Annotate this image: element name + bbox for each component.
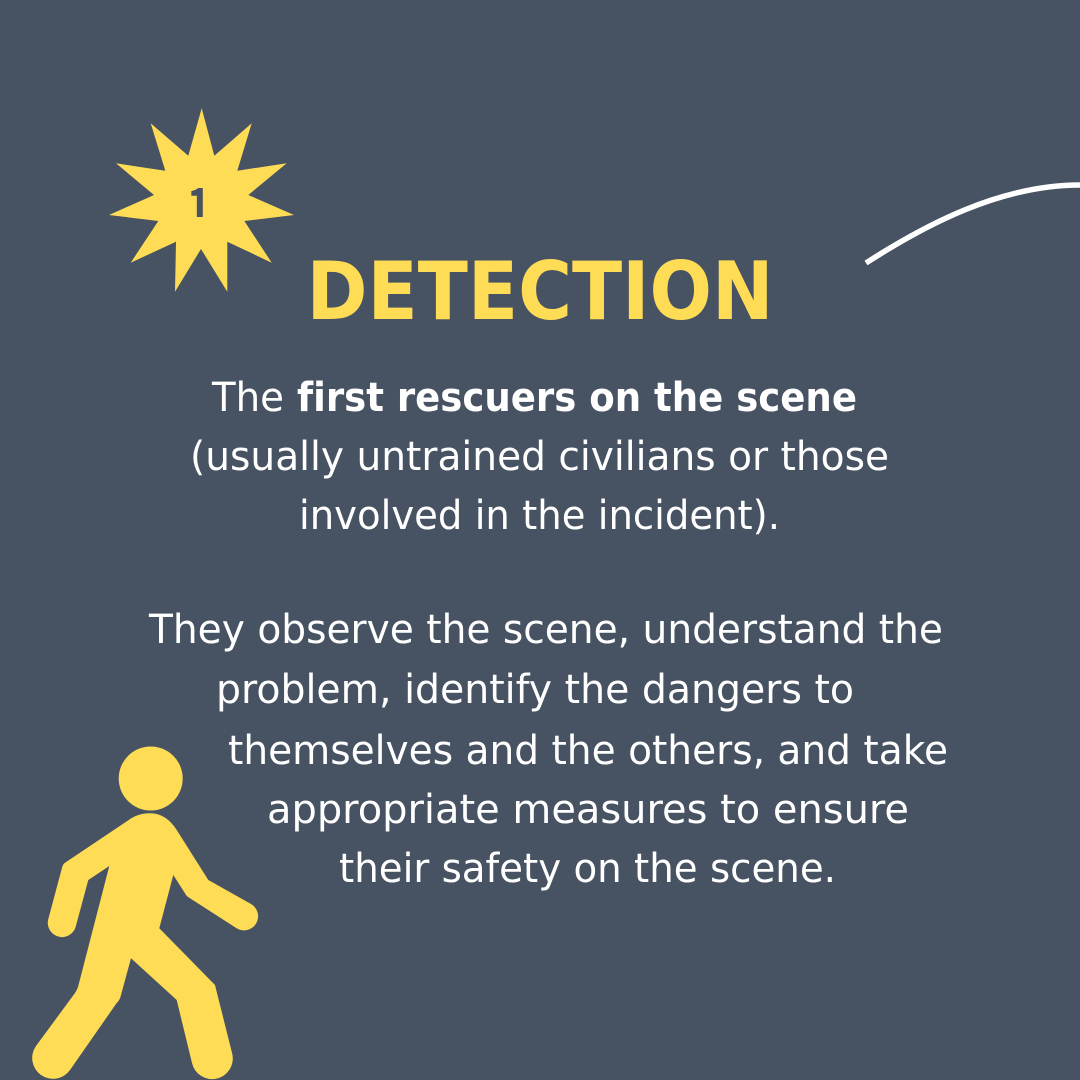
text block: what they do: They observe the scene, understand the: [148, 607, 943, 653]
step number: 1: [187, 167, 211, 239]
walker body: [32, 813, 258, 1079]
icon: yellow starburst with number 1: [109, 108, 294, 292]
icon: walking person: [32, 746, 258, 1079]
text block: who the first rescuers are: The: [211, 375, 284, 421]
text block: what they do: [148, 607, 948, 892]
title: DETECTION: [306, 245, 774, 338]
line 2: problem, identify the dangers to: [216, 667, 854, 713]
text block: who the first rescuers are: [190, 375, 889, 539]
line 5: their safety on the scene.: [339, 846, 836, 892]
bold emphasis: first rescuers on the scene: [297, 375, 857, 421]
line 3: involved in the incident).: [299, 493, 780, 539]
line 2: (usually untrained civilians or those: [190, 434, 889, 480]
decorative curved white arrow line: [866, 185, 1080, 263]
line 3: themselves and the others, and take: [228, 728, 948, 774]
line 4: appropriate measures to ensure: [267, 787, 909, 833]
